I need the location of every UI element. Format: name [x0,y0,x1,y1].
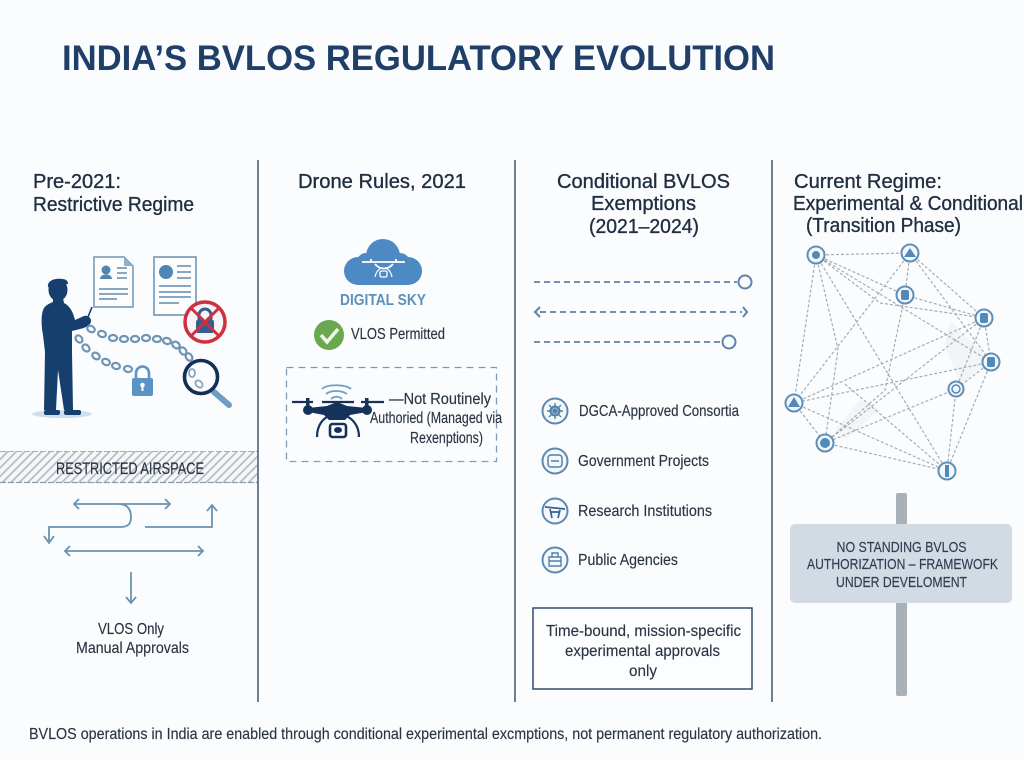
panel: Conditional BVLOS exemptions [533,171,752,689]
heading: Conditional BVLOS Exemptions: (2021–2024) [589,216,699,238]
restricted airspace band [0,451,257,483]
heading: Drone Rules, 2021: Drone Rules, 2021 [298,171,466,193]
icon: prohibited lock [185,302,225,342]
text: not routinely authorised [370,391,502,447]
flow arrows [44,499,217,603]
restricted airspace band: RESTRICTED AIRSPACE [56,460,204,478]
heading: Conditional BVLOS Exemptions: Exemptions [591,193,696,215]
icon: document with badge [154,257,196,315]
heading: Pre-2021: Restrictive Regime [33,194,194,216]
dashed timelines [534,276,752,348]
shadow under person [32,410,92,418]
heading: Conditional BVLOS Exemptions [557,171,730,238]
item: public agencies [542,548,678,572]
title: INDIA’S BVLOS REGULATORY EVOLUTION [62,39,775,78]
item: public agencies: Public Agencies [578,552,678,569]
item: DGCA-approved consortia [542,398,739,424]
item: research institutions: Research Institutions [578,503,712,520]
text: VLOS only, manual approvals: Manual Approvals [76,640,189,657]
icon: check mark [314,320,344,350]
item: government projects: Government Projects [578,453,709,470]
heading: Pre-2021 [33,171,194,216]
signpost: NO STANDING BVLOS [836,539,966,556]
icon: document with person [94,257,133,307]
text: VLOS permitted: VLOS Permitted [351,326,445,343]
text: VLOS only, manual approvals: VLOS Only [98,621,164,638]
dashed box [286,368,496,462]
footer note: BVLOS operations in India are enabled through conditional experimental excmptions, not permanent regulatory authorization. [29,726,822,743]
panel: Pre-2021 restrictive regime [0,171,257,657]
text: not routinely authorised: Authoried (Managed via [370,410,502,427]
item: government projects [542,448,709,474]
heading: Conditional BVLOS Exemptions: Conditional BVLOS [557,171,730,193]
text: not routinely authorised: Rexenptions) [410,430,483,447]
icon: drone with signal [292,385,384,437]
callout: time-bound approvals: only [629,663,657,680]
icon: magnifying glass [184,360,229,405]
panel: Drone Rules 2021 [286,171,502,462]
item: research institutions [542,498,712,524]
heading: Current Regime: Current Regime: [794,171,942,193]
network diagram [786,244,1000,480]
heading: Current Regime: (Transition Phase) [806,215,961,237]
text: not routinely authorised: —Not Routinely [389,391,491,408]
text: VLOS only, manual approvals [76,621,189,657]
callout: time-bound approvals: Time-bound, mission-specific [546,623,741,640]
icon: cloud with drone [344,239,422,285]
heading: Pre-2021: Pre-2021: [33,171,121,193]
signpost [790,493,1012,696]
callout: time-bound approvals [533,608,752,689]
callout: time-bound approvals: experimental approvals [565,643,720,660]
panel: current regime [786,171,1023,696]
heading: Current Regime [793,171,1023,237]
signpost: UNDER DEVELOMENT [836,574,967,591]
icon: person silhouette with controller [42,279,92,415]
icon: padlock [132,366,153,396]
item: DGCA-approved consortia: DGCA-Approved Consortia [579,403,739,420]
text: Digital Sky: DIGITAL SKY [340,292,427,309]
icon: chains [74,324,194,373]
